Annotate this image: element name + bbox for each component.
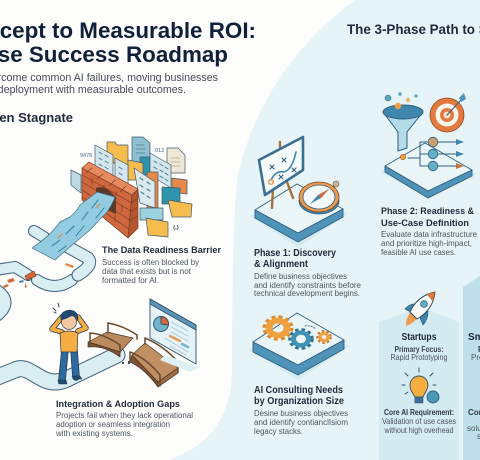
subtitle — [0, 72, 218, 96]
text: phase 2: feasible AI use cases. — [381, 248, 456, 257]
text: startups requirement: Core AI Requirement: — [384, 408, 454, 417]
icon: phase 2 funnel, target and decision tree — [380, 92, 477, 198]
icon: rocket — [405, 292, 435, 326]
text: phase 1 — [254, 247, 362, 298]
text: data readiness barrier: data that exists but is not — [102, 267, 192, 276]
text: phase 1: Phase 1: Discovery — [254, 247, 336, 259]
text: integration and adoption gaps: Integration & Adoption Gaps — [56, 399, 180, 410]
labels: floating data codes: 012 — [155, 148, 164, 154]
text: integration and adoption gaps: adoption or seamless integration — [56, 420, 170, 429]
text: integration and adoption gaps — [55, 399, 193, 438]
text: phase 2: Phase 2: Readiness & — [381, 206, 474, 217]
text: startups requirement: Validation of use cases — [382, 417, 456, 426]
icon: confused person — [52, 303, 86, 384]
text: phase 1: and identify constraints before — [254, 281, 362, 290]
text: ai consulting needs: and identify contianclIsiom — [254, 418, 348, 427]
text: phase 2: Use-Case Definition — [381, 218, 469, 229]
text: data readiness barrier: formatted for AI. — [102, 276, 159, 285]
text: startups requirement: without high overhead — [384, 426, 454, 435]
text: ai consulting needs: by Organization Size — [254, 395, 344, 407]
icon: broken roadmap path — [0, 231, 117, 382]
panel: small business card — [463, 276, 480, 460]
icon: documents and folders behind brick wall — [71, 137, 192, 237]
icon: dashboard monitor — [150, 299, 200, 372]
icon: phase 1 strategy board and compass — [250, 137, 348, 248]
text: startups focus: Primary Focus: — [394, 345, 444, 354]
labels: floating data codes — [80, 148, 180, 231]
icon: broken bridges — [88, 323, 178, 387]
text: startups focus: Rapid Prototyping — [390, 353, 448, 362]
icon: data stream through wall — [32, 192, 115, 260]
panel: startups card — [379, 292, 459, 460]
text: startups focus: Startups — [402, 332, 437, 343]
icon: gears on platform — [248, 313, 349, 380]
panel: blue roadmap background — [168, 0, 480, 460]
text: ai consulting needs: legacy stacks. — [254, 427, 303, 436]
icon: brick wall — [82, 162, 138, 238]
labels: floating data codes: {,} — [173, 225, 180, 231]
text: data readiness barrier — [102, 245, 221, 285]
text: data readiness barrier: The Data Readiness Barrier — [102, 245, 221, 256]
icon: light bulb — [402, 368, 439, 403]
text: phase 2: Evaluate data infrastructure — [381, 230, 478, 239]
text: ai consulting needs: AI Consulting Needs — [254, 384, 343, 396]
title — [0, 18, 256, 67]
text: phase 1: Define business objectives — [254, 272, 347, 281]
text: integration and adoption gaps: Projects fail when they lack operational — [56, 411, 193, 420]
labels: floating data codes: 9478 — [80, 153, 92, 159]
text: data readiness barrier: Success is often blocked by — [102, 258, 199, 267]
text: phase 1: technical development begins. — [254, 289, 360, 298]
text: startups focus — [390, 332, 448, 362]
text: ai consulting needs: Desine business objectives — [254, 409, 348, 418]
text: phase 1: & Alignment — [254, 258, 308, 270]
text: phase 2: and prioritize high-impact, — [381, 239, 472, 248]
text: ai consulting needs — [254, 384, 348, 436]
text: phase 2 — [381, 206, 478, 257]
text: integration and adoption gaps: with existing systems. — [55, 429, 133, 438]
text: startups requirement — [382, 408, 456, 435]
